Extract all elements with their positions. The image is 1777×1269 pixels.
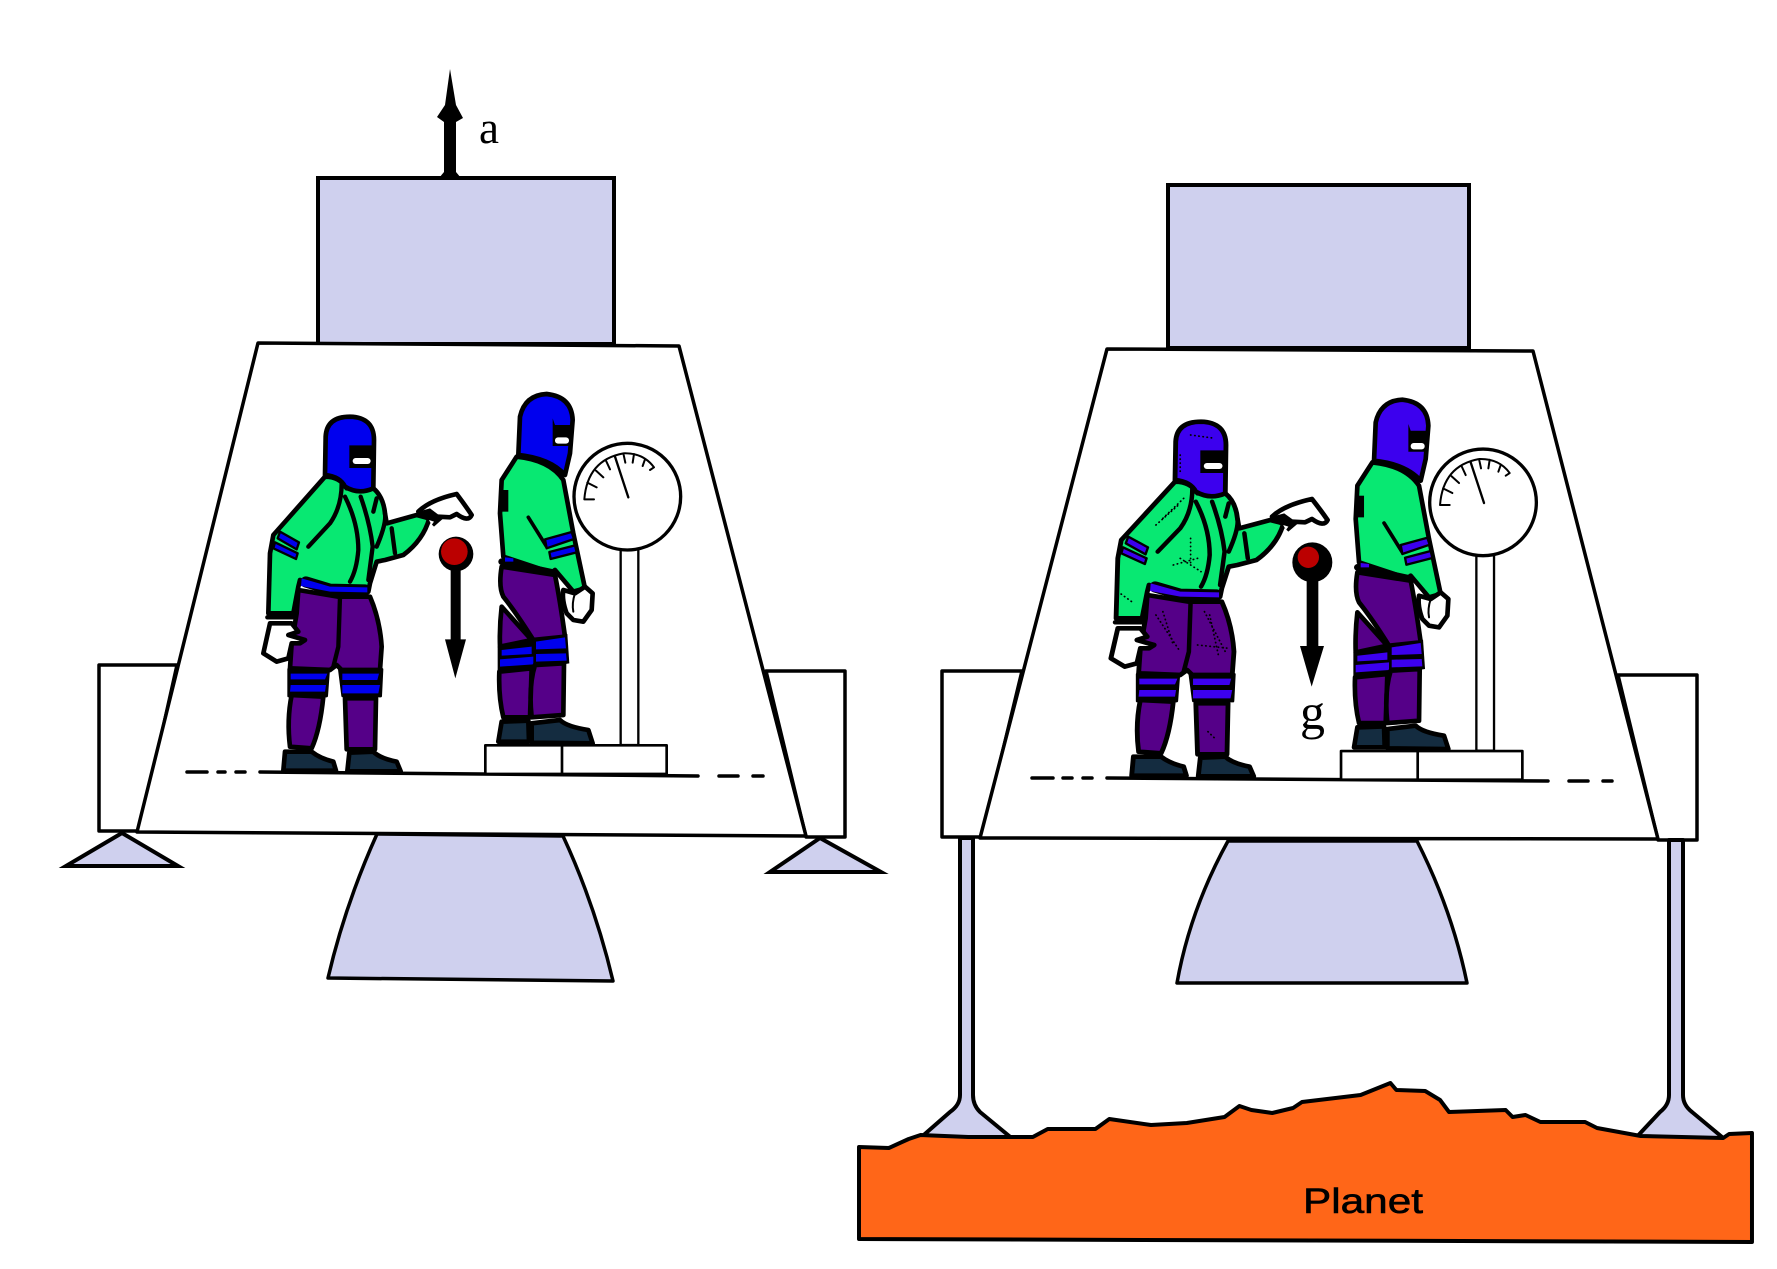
cabin floor — [1032, 778, 1612, 781]
right landing pod — [766, 671, 845, 837]
acceleration arrow — [437, 69, 463, 178]
right foot — [770, 838, 881, 872]
cabin — [137, 343, 806, 836]
label: g: g — [1300, 684, 1325, 740]
falling ball with arrow — [1292, 542, 1332, 687]
top module — [1168, 185, 1469, 348]
nozzle — [328, 834, 613, 981]
cabin floor — [187, 772, 763, 776]
left pod — [942, 671, 1022, 837]
panel: accelerating spacecraft in free space — [66, 69, 881, 981]
weighing scale — [1341, 449, 1536, 780]
right landing leg — [1632, 840, 1728, 1142]
left foot — [66, 833, 178, 866]
weighing scale — [485, 443, 681, 774]
right pod — [1618, 675, 1697, 840]
falling ball with arrow — [439, 537, 473, 678]
astronaut on scale — [498, 394, 593, 743]
top module — [318, 178, 614, 344]
left landing leg — [918, 838, 1014, 1140]
left landing pod — [99, 665, 177, 831]
astronaut dropping ball — [263, 417, 472, 771]
label: a: a — [479, 103, 499, 153]
planet — [859, 1083, 1752, 1242]
astronaut on scale — [1353, 400, 1448, 749]
label: Planet: Planet — [1303, 1182, 1423, 1221]
cabin — [980, 349, 1658, 839]
panel: spacecraft at rest on a planet — [859, 185, 1752, 1242]
astronaut dropping ball — [1111, 422, 1328, 776]
nozzle — [1177, 841, 1467, 983]
